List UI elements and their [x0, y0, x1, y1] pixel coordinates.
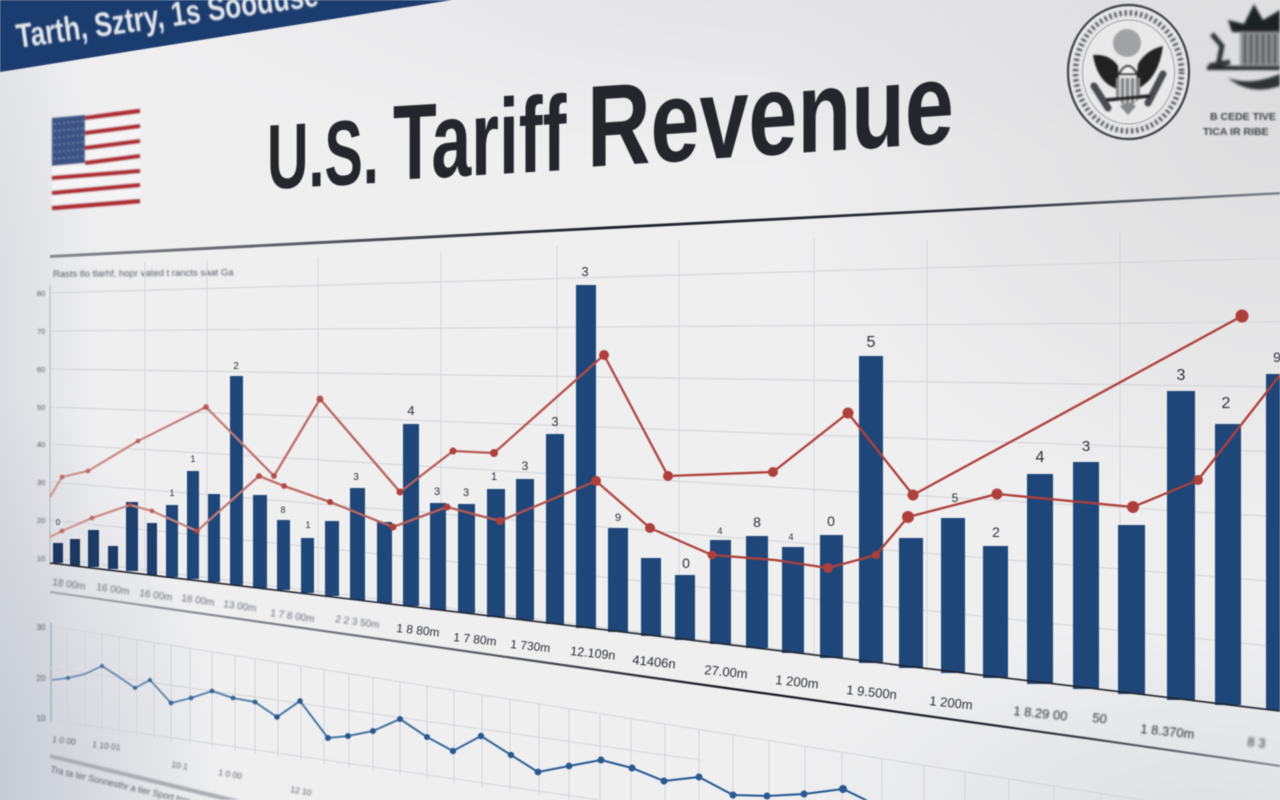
y axis labels: 70 [37, 327, 45, 336]
y axis labels: 30 [37, 478, 45, 487]
x axis labels: 1 8.29 00 [1013, 703, 1068, 724]
x axis labels: 2 2 3 50m [335, 614, 380, 631]
bar value labels: 4 [1036, 449, 1045, 466]
lower chart x labels: 12 10 [290, 784, 313, 798]
bar value labels: 8 [753, 514, 761, 530]
title [267, 38, 954, 209]
lower chart x labels [52, 734, 313, 798]
chart divider [50, 592, 1280, 766]
x axis labels: 1 200m [775, 672, 819, 692]
y axis labels [37, 289, 45, 563]
title: U.S. [267, 101, 379, 209]
x axis labels: 1 7 8 00m [270, 608, 315, 625]
bar value labels: 5 [867, 334, 876, 351]
bar value labels: 1 [305, 520, 311, 530]
main chart grid [50, 232, 1280, 712]
blue trend line [52, 664, 870, 800]
bar value labels: 9 [615, 512, 621, 524]
main chart [37, 232, 1280, 751]
x axis labels: 41406n [632, 652, 676, 672]
bar value labels: 3 [1082, 438, 1090, 455]
red trend line: lower [50, 375, 1280, 573]
lower chart [37, 623, 1280, 800]
bar value labels [56, 264, 1280, 571]
y axis labels: 40 [37, 440, 45, 449]
title: Revenue [587, 38, 954, 192]
bar value labels: 1 [190, 454, 196, 464]
chart subtitle: Rasts tlo tlarhf, hopr vated t rancts saat Ga [53, 267, 234, 280]
bar value labels: 3 [522, 459, 529, 473]
bar value labels: 3 [434, 486, 440, 498]
lower chart x labels: 1 0 00 [218, 767, 243, 781]
bar value labels: 2 [233, 361, 239, 372]
lower chart x labels: 10 1 [171, 759, 189, 772]
x axis labels: 1 9.500n [846, 682, 898, 702]
icon: eagle seal [1068, 5, 1189, 139]
bar value labels: 0 [56, 518, 61, 527]
x axis labels: 27.00m [704, 662, 748, 682]
x axis labels: 16 00m [139, 588, 173, 604]
lower axis rule [50, 754, 240, 800]
y axis labels: 60 [37, 365, 45, 374]
crest caption: B CEDE TIVE [1210, 111, 1276, 123]
bar value labels: 4 [788, 532, 794, 542]
lower chart x labels: 1 10 01 [92, 739, 121, 752]
top banner [0, 0, 452, 72]
title: Tariff [393, 75, 567, 204]
lower chart y labels: 20 [37, 674, 46, 683]
x axis labels: 1 8.370m [1140, 721, 1195, 742]
x axis labels: 1 8 80m [396, 621, 440, 640]
x axis labels: 8 3 [1247, 734, 1266, 751]
x axis labels: 50 [1092, 710, 1108, 726]
header divider [50, 192, 1280, 258]
x axis labels [52, 577, 1266, 751]
lower chart x labels: 1 0 00 [52, 734, 77, 747]
lower chart y labels: 30 [37, 623, 46, 632]
bar value labels: 1 [169, 488, 175, 498]
lower chart grid [50, 623, 1280, 800]
bar value labels: 8 [280, 505, 286, 515]
bar value labels: 3 [1177, 367, 1186, 384]
red trend line: upper [50, 310, 1248, 500]
crest caption: TICA IR RIBE [1203, 126, 1269, 138]
bar value labels: 3 [581, 264, 589, 279]
lower chart y labels [37, 623, 46, 723]
bar value labels: 0 [682, 555, 690, 571]
bar value labels: 5 [952, 491, 959, 505]
icon: crest emblem [1207, 4, 1280, 90]
y axis labels: 20 [37, 516, 45, 525]
y axis labels: 80 [37, 289, 45, 298]
y axis labels: 10 [37, 554, 45, 563]
x axis labels: 12.109n [570, 644, 616, 663]
bar value labels: 4 [717, 526, 723, 536]
lower chart y labels: 10 [37, 714, 46, 723]
bar value labels: 3 [353, 472, 359, 483]
bar value labels: 4 [407, 403, 415, 418]
x axis labels: 1 200m [929, 693, 973, 713]
bar value labels: 0 [827, 513, 835, 529]
y axis labels: 50 [37, 403, 45, 412]
bar value labels: 3 [551, 414, 559, 429]
bar value labels: 2 [1222, 395, 1231, 412]
icon: U.S. flag [52, 110, 140, 210]
bar value labels: 1 [491, 471, 497, 483]
x axis labels: 1 7 80m [453, 630, 497, 649]
x axis labels: 1 730m [510, 637, 551, 655]
crest caption [1203, 111, 1276, 138]
x axis baseline [50, 563, 1280, 711]
x axis labels: 18 00m [52, 577, 86, 593]
x axis labels: 13 00m [223, 599, 257, 615]
bar value labels: 2 [992, 524, 1000, 540]
bar value labels: 3 [463, 487, 469, 499]
x axis labels: 16 00m [96, 582, 130, 598]
bar series [53, 285, 1280, 710]
x axis labels: 18 00m [181, 593, 215, 609]
